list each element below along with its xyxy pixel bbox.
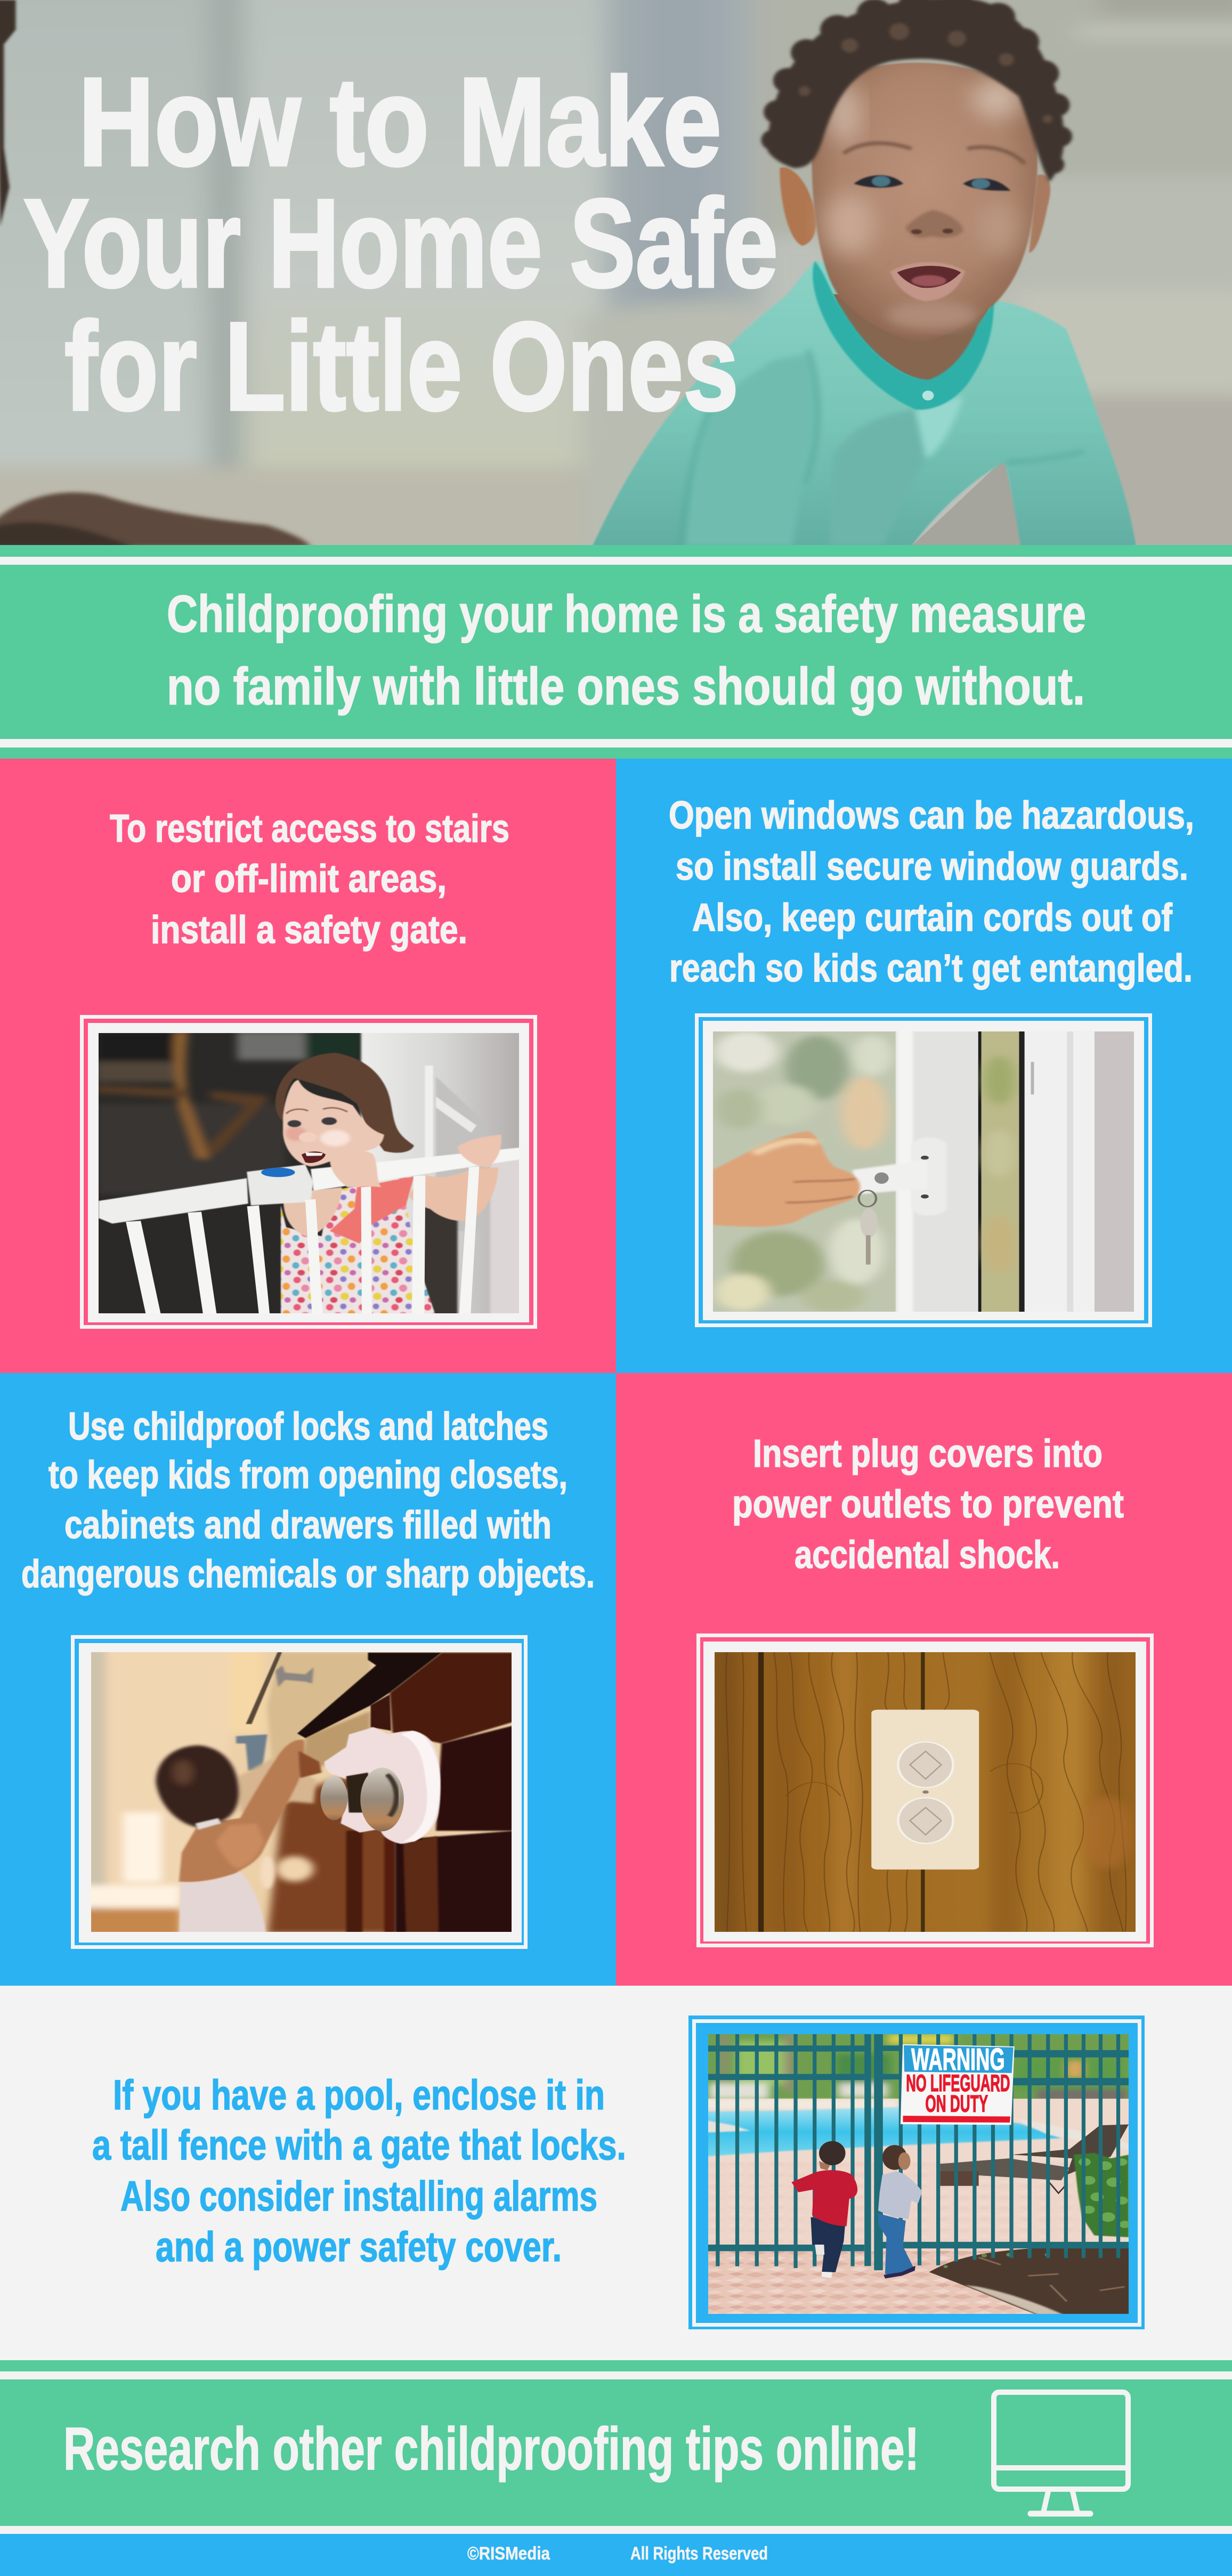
photo: hand locking window bbox=[707, 1029, 1147, 1315]
door knobs bbox=[320, 1776, 347, 1820]
warning sign bbox=[901, 2042, 1015, 2125]
panel: locks and latches bbox=[0, 1373, 616, 1986]
ears bbox=[780, 167, 816, 246]
eyebrows bbox=[844, 143, 1025, 164]
right door panels bbox=[390, 1653, 514, 1743]
hero banner bbox=[0, 0, 1232, 566]
photo: toddlers at pool fence: NO LIFEGUARD bbox=[906, 2070, 1010, 2096]
text: locks and latches tip bbox=[21, 1405, 595, 1596]
photo frame: plug covers bbox=[698, 1636, 1152, 1946]
key bbox=[859, 1190, 878, 1264]
door lock bbox=[325, 1727, 441, 1844]
plug cover top bbox=[898, 1742, 953, 1787]
title bbox=[23, 52, 778, 437]
icon: desktop monitor bbox=[994, 2392, 1128, 2514]
child bbox=[156, 1740, 322, 1934]
intro text bbox=[167, 584, 1086, 716]
hands on rail bbox=[330, 1150, 382, 1187]
panel: window guards bbox=[616, 759, 1232, 1373]
title: Your Home Safe bbox=[23, 173, 778, 314]
text: safety gate tip: To restrict access to stairs bbox=[110, 807, 509, 850]
upper knob bbox=[275, 1665, 313, 1687]
title: How to Make bbox=[78, 52, 722, 192]
shirt bbox=[593, 261, 1136, 546]
text: safety gate tip: or off-limit areas, bbox=[171, 857, 447, 900]
text: window guards tip bbox=[669, 794, 1194, 990]
window handle bbox=[911, 1137, 947, 1216]
photo frame: window guards bbox=[697, 1015, 1150, 1326]
outlet plate bbox=[871, 1710, 979, 1870]
text: safety gate tip bbox=[110, 807, 509, 952]
neck bbox=[833, 294, 990, 381]
photo: toddlers at pool fence bbox=[703, 2030, 1135, 2318]
hair bbox=[275, 1053, 414, 1153]
photo: child reaching for door lock bbox=[83, 1645, 514, 1940]
eyes bbox=[854, 175, 1010, 191]
boy in red sweater bbox=[791, 2141, 857, 2278]
text: pool fence tip: a tall fence with a gate that locks. bbox=[92, 2121, 626, 2168]
bush bbox=[1074, 2153, 1130, 2237]
hand at lower left bbox=[0, 492, 310, 547]
mulch bbox=[929, 2246, 1135, 2318]
intro text: no family with little ones should go without. bbox=[167, 657, 1085, 716]
text: plug covers tip: Insert plug covers into bbox=[753, 1432, 1103, 1475]
girl's dress bbox=[281, 1176, 436, 1316]
hallway latch bbox=[236, 1734, 268, 1771]
dark top rail bbox=[297, 1653, 441, 1738]
text: locks and latches tip: Use childproof locks and latches bbox=[68, 1405, 548, 1448]
upper door panel bbox=[268, 1653, 371, 1769]
photo frame: pool fence bbox=[688, 2016, 1145, 2329]
title: for Little Ones bbox=[64, 296, 739, 437]
panel: safety gate bbox=[0, 759, 616, 1373]
text: locks and latches tip: dangerous chemicals or sharp objects. bbox=[21, 1553, 595, 1596]
text: pool fence tip: Also consider installing alarms bbox=[120, 2172, 597, 2220]
paving bbox=[703, 2251, 1135, 2318]
hand bbox=[712, 1131, 860, 1227]
gate bars bbox=[126, 1166, 479, 1316]
hair bbox=[761, 0, 1072, 182]
broad wood tones bbox=[714, 1649, 1124, 1935]
copyright bar bbox=[0, 2534, 1232, 2576]
face bbox=[812, 62, 1038, 342]
text: safety gate tip: install a safety gate. bbox=[151, 908, 467, 952]
hero photo: smiling baby in living room bbox=[0, 0, 1232, 566]
middle door bbox=[268, 1776, 395, 1934]
mouth bbox=[890, 262, 965, 301]
fence bbox=[708, 2034, 1130, 2270]
gate rail bbox=[99, 1178, 248, 1224]
arms bbox=[283, 1187, 342, 1237]
warning sign: ON DUTY bbox=[925, 2090, 988, 2117]
copyright text: ©RISMedia bbox=[467, 2544, 550, 2564]
text: locks and latches tip: cabinets and drawers filled with bbox=[64, 1504, 552, 1547]
text: pool fence tip: If you have a pool, enclose it in bbox=[113, 2071, 605, 2118]
panel: pool fence bbox=[0, 1986, 1232, 2360]
boy in striped top bbox=[878, 2145, 922, 2279]
text: locks and latches tip: to keep kids from opening closets, bbox=[48, 1453, 568, 1497]
intro band bbox=[0, 545, 1232, 759]
nose bbox=[905, 210, 963, 238]
text: pool fence tip: and a power safety cover. bbox=[156, 2223, 562, 2270]
wood grain bbox=[726, 1652, 1126, 1935]
call to action text: Research other childproofing tips online! bbox=[63, 2415, 919, 2482]
text: plug covers tip: accidental shock. bbox=[795, 1533, 1060, 1577]
photo: toddlers at pool fence: WARNING bbox=[911, 2042, 1005, 2077]
sofa gap bbox=[912, 459, 1023, 546]
photo: covered outlet on wood wall bbox=[711, 1649, 1139, 1935]
photo frame: safety gate bbox=[82, 1017, 535, 1327]
photo frame: locks and latches bbox=[72, 1637, 525, 1947]
text: pool fence tip bbox=[92, 2071, 626, 2270]
lounge chairs bbox=[940, 2124, 1129, 2193]
photo: toddler at safety gate bbox=[96, 1031, 524, 1316]
pool deck bbox=[703, 2099, 1135, 2251]
panel: plug covers bbox=[616, 1373, 1232, 1986]
text: plug covers tip: power outlets to prevent bbox=[732, 1483, 1124, 1526]
footer call-to-action band bbox=[0, 2360, 1232, 2534]
face bbox=[283, 1080, 384, 1166]
rights text: All Rights Reserved bbox=[630, 2544, 768, 2564]
pool water bbox=[703, 2107, 1061, 2157]
text: plug covers tip bbox=[732, 1432, 1124, 1577]
collar bbox=[813, 261, 994, 410]
plug cover bottom bbox=[898, 1798, 953, 1843]
